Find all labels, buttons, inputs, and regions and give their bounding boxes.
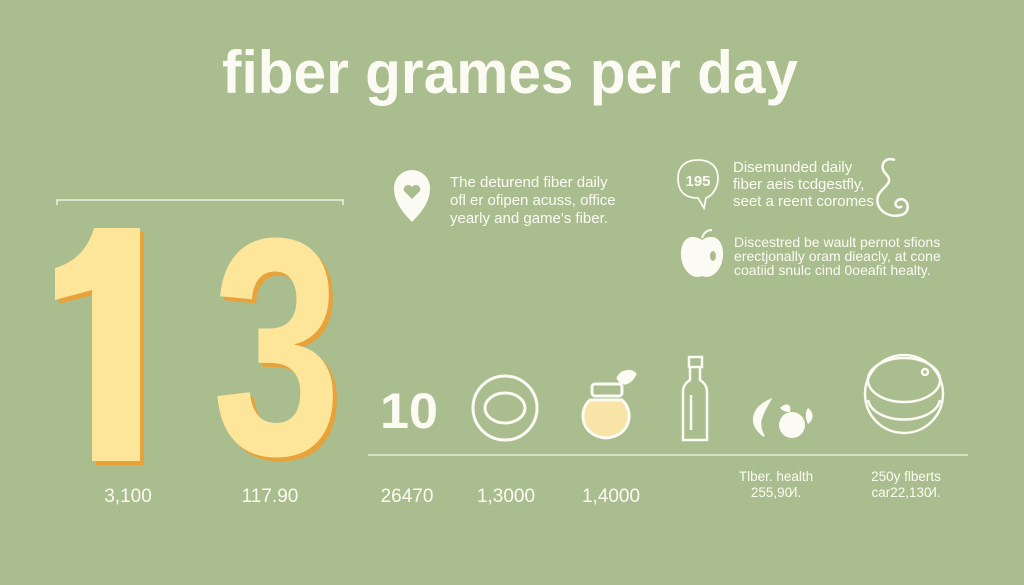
icon: leaf and berry bbox=[754, 400, 812, 438]
text block: disemunded: fiber aeis tcdgestfly, bbox=[733, 176, 864, 193]
bracket line above big numbers bbox=[57, 200, 343, 205]
caption: 250y fiberts: 250y flberts bbox=[871, 469, 941, 484]
icon: swirl bbox=[877, 159, 908, 216]
bottom labels: 1,4000 bbox=[582, 486, 640, 507]
number 10: 10 bbox=[380, 383, 438, 439]
text block: heart: The deturend fiber daily bbox=[450, 174, 608, 191]
icon: ring bbox=[473, 376, 537, 440]
icon: heart pin bbox=[394, 170, 430, 222]
text block: discestred: Discestred be wault pernot sfions bbox=[734, 234, 940, 250]
text block: discestred: erectjonally oram dieacly, at cone bbox=[734, 248, 941, 264]
text block: heart: yearly and game's fiber. bbox=[450, 210, 608, 227]
bottom labels: 26470 bbox=[381, 486, 433, 507]
icon: speech bubble 195: 195 bbox=[685, 173, 711, 190]
title: fiber grames per day bbox=[222, 39, 799, 106]
caption: tiber health: 255,90⁄l. bbox=[751, 485, 801, 500]
big number 3: 3 bbox=[216, 179, 345, 525]
label 3,100: 3,100 bbox=[104, 486, 152, 507]
caption: 250y fiberts: car22,130⁄l. bbox=[871, 485, 941, 500]
bottom labels: 1,3000 bbox=[477, 486, 535, 507]
text block: disemunded: Disemunded daily bbox=[733, 159, 853, 176]
label 117.90: 117.90 bbox=[242, 486, 298, 507]
text block: disemunded: seet a reent coromes bbox=[733, 193, 874, 210]
big number 3: 3 bbox=[212, 175, 341, 521]
icon: apple bbox=[681, 230, 723, 277]
big number 1 bbox=[55, 228, 144, 465]
bottom labels bbox=[381, 486, 640, 507]
icon: bottle bbox=[683, 357, 707, 440]
icon: sphere bbox=[865, 355, 943, 433]
icon: speech bubble 195 bbox=[678, 160, 718, 208]
text block: heart: ofl er ofipen acuss, office bbox=[450, 192, 616, 209]
icon: jar bbox=[583, 371, 635, 438]
text block: discestred: coatiid snulc cind 0oeafit healty. bbox=[734, 262, 931, 278]
baseline divider bbox=[368, 454, 968, 456]
caption: tiber health: Tlber. health bbox=[739, 469, 813, 484]
